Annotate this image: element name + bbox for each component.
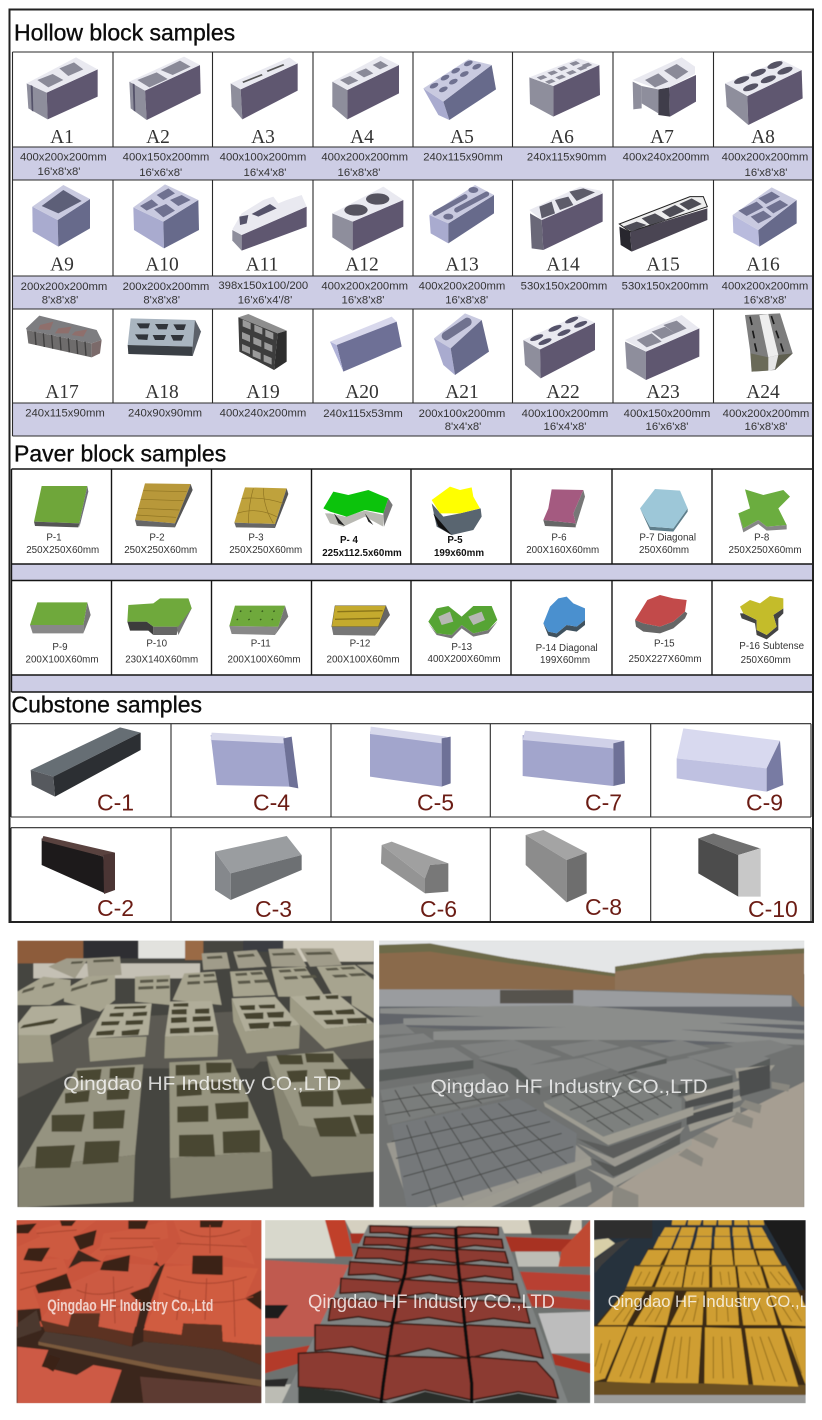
icon: block A21	[434, 313, 489, 375]
paver labels row 1: 250X250X60mm	[124, 545, 197, 556]
dimension labels row 3: 240x90x90mm	[128, 408, 202, 420]
dimension labels row 2: 398x150x100/200	[218, 280, 308, 292]
paver labels row 1: P-6	[551, 533, 567, 544]
watermark: Qingdao HF Industry CO.,LTD	[308, 1292, 555, 1313]
paver labels row 2: P-14 Diagonal	[536, 643, 598, 654]
icon: block A8	[725, 59, 803, 125]
panel: cubstone samples	[11, 692, 811, 922]
paver labels row 2: 200X100X60mm	[26, 655, 98, 666]
dimension labels row 2: 8'x8'x8'	[42, 294, 78, 306]
icons: hollow blocks right, row 3	[434, 313, 793, 380]
table grid: pavers	[12, 469, 812, 692]
icon: paver P-3	[234, 487, 288, 528]
paver labels row 2: 250X60mm	[741, 655, 791, 666]
icon: block A14	[529, 187, 603, 250]
watermark: Qingdao HF Industry CO.,LTD	[63, 1074, 341, 1095]
dimension labels row 1: A5	[450, 127, 474, 148]
heading: paver block samples: Paver block samples	[14, 441, 226, 467]
icon: curb C-10	[698, 833, 761, 897]
curb labels: C-10	[748, 896, 798, 922]
icon: curb C-9	[677, 728, 783, 792]
icon: paver P-9	[30, 602, 91, 633]
icon: block A3	[231, 57, 298, 119]
curb labels: C-9	[746, 790, 783, 816]
dimension labels row 1: 16'x6'x8'	[139, 167, 182, 179]
icon: paver P-5	[432, 487, 482, 535]
icon: block A20	[330, 317, 402, 372]
dimension labels row 1: A1	[50, 127, 74, 148]
dimension labels row 1: 16'x4'x8'	[244, 167, 286, 179]
curb labels: C-4	[253, 790, 290, 816]
dimension labels row 3: 400x150x200mm	[624, 408, 710, 420]
icon: paver P-2	[135, 483, 193, 527]
curb labels: C-7	[585, 790, 622, 816]
dimension labels row 2	[21, 255, 808, 306]
curb labels: C-3	[255, 896, 292, 922]
dimension labels row 2: 530x150x200mm	[521, 280, 607, 292]
photo: red grass pavers	[16, 1220, 262, 1403]
photo: paver bricks in yard	[379, 941, 806, 1207]
paver labels row 1: P-3	[248, 533, 264, 544]
paver labels row 1: 250X60mm	[639, 545, 689, 556]
dimension labels row 1: 400x100x200mm	[220, 152, 306, 164]
curb labels: C-1	[97, 790, 134, 816]
dimension labels row 2: A12	[345, 255, 379, 276]
paver labels row 1: P- 4	[340, 535, 359, 546]
icon: block A23	[625, 315, 699, 380]
dimension labels row 2: A13	[445, 255, 479, 276]
paver labels row 1: 225x112.5x60mm	[322, 548, 402, 559]
icons: cubstones left	[31, 727, 302, 900]
dimension labels row 1: A6	[550, 127, 574, 148]
paver labels row 2: 199X60mm	[540, 655, 590, 666]
dimension labels row 3: A17	[45, 382, 79, 403]
dimension labels row 2: A16	[746, 255, 780, 276]
icon: block A6	[529, 58, 600, 117]
icon: block A1	[27, 57, 98, 119]
dimension labels row 3	[25, 382, 809, 433]
icon: paver P-12	[332, 606, 390, 636]
icons: cubstones right	[370, 727, 783, 902]
dimension labels row 3: 240x115x53mm	[323, 408, 403, 420]
outer frame	[10, 10, 813, 922]
dimension labels row 1: 400x200x200mm	[722, 152, 808, 164]
dimension labels row 2: 400x200x200mm	[722, 280, 808, 292]
dimension labels row 3: A22	[546, 382, 580, 403]
dimension labels row 1: 400x150x200mm	[123, 152, 209, 164]
icon: block A7	[633, 57, 696, 117]
icon: block A9	[32, 185, 90, 247]
dimension labels row 1: 240x115x90mm	[527, 152, 606, 164]
dimension labels row 2: A15	[646, 255, 680, 276]
photo: red interlocking pavers	[265, 1220, 590, 1403]
dimension labels row 1: 16'x8'x8'	[338, 167, 380, 179]
dimension labels row 1: 240x115x90mm	[423, 152, 503, 164]
icon: block A19	[238, 314, 287, 370]
paver labels row 2: 250X227X60mm	[629, 654, 701, 665]
dimension labels row 1: 400x200x200mm	[20, 152, 107, 164]
paver labels row 1: P-1	[46, 533, 62, 544]
icon: paver P-4	[323, 490, 393, 527]
dimension labels row 2: 530x150x200mm	[622, 280, 708, 292]
dimension labels row 2: 16'x6'x4'/8'	[238, 294, 292, 306]
paver labels row 2: P-10	[146, 639, 168, 650]
icon: curb C-3	[215, 836, 302, 900]
icons: pavers P-13 to P-16	[428, 595, 783, 639]
paver labels row 1: P-7 Diagonal	[639, 533, 696, 544]
dimension labels row 1: 16'x8'x8'	[745, 167, 787, 179]
dimension labels row 2: 16'x8'x8'	[342, 294, 384, 306]
dimension labels row 3: A20	[345, 382, 379, 403]
dimension labels row 2: A14	[546, 255, 580, 276]
icons: pavers P-9 to P-12	[30, 598, 390, 636]
dimension labels row 1: 16'x8'x8'	[38, 166, 80, 178]
icon: block A11	[232, 195, 307, 251]
icon: block A12	[332, 187, 403, 251]
dimension labels row 3: 16'x6'x8'	[646, 421, 688, 433]
icon: paver P-7	[640, 489, 688, 532]
curb labels: C-6	[420, 896, 457, 922]
dimension labels row 2: A10	[145, 255, 179, 276]
icons: hollow blocks right, rows 1-2	[423, 57, 803, 252]
icon: block A18	[128, 318, 201, 356]
curb labels	[97, 790, 798, 922]
icon: paver P-15	[635, 595, 687, 633]
dimension labels row 1: A4	[350, 127, 374, 148]
dimension labels row 1: A2	[146, 127, 170, 148]
paver labels row 2: P-9	[52, 642, 68, 653]
icon: curb C-6	[381, 842, 448, 893]
dimension labels row 3: A21	[445, 382, 479, 403]
paver labels row 1: 200X160X60mm	[526, 545, 599, 556]
dimension labels row 2: 16'x8'x8'	[445, 294, 488, 306]
paver labels row 2: 230X140X60mm	[125, 655, 198, 666]
icon: paver P-1	[34, 486, 88, 527]
icon: curb C-7	[523, 731, 625, 786]
icons: pavers P-5 to P-8	[432, 487, 790, 535]
paver labels row 1: 250X250X60mm	[229, 545, 302, 556]
heading: hollow block samples: Hollow block samples	[14, 20, 235, 46]
icon: paver P-16	[740, 596, 783, 639]
icon: block A5	[423, 59, 496, 120]
paver labels row 1: 250X250X60mm	[729, 545, 801, 556]
dimension labels row 2: A11	[246, 255, 278, 276]
icon: block A24	[745, 313, 793, 372]
dimension labels row 2: 200x200x200mm	[123, 281, 209, 293]
paver labels row 2: 400X200X60mm	[428, 654, 500, 665]
dimension labels row 3: 8'x4'x8'	[445, 421, 481, 433]
dimension labels row 2: 400x200x200mm	[321, 280, 408, 292]
watermark: Qingdao HF Industry CO.,LTD	[431, 1077, 708, 1098]
curb labels: C-5	[417, 790, 454, 816]
icons: pavers P-1 to P-4	[34, 483, 393, 528]
paver labels row 2: 200X100X60mm	[228, 655, 300, 666]
dimension labels row 3: 240x115x90mm	[25, 408, 105, 420]
icon: curb C-8	[526, 830, 587, 902]
dimension labels row 2: 8'x8'x8'	[143, 294, 180, 306]
icons: hollow blocks left, row 3	[26, 314, 402, 372]
dimension labels row 2: A9	[50, 255, 74, 276]
icon: curb C-4	[211, 733, 298, 788]
dimension labels row 3: A23	[646, 382, 680, 403]
table grid: hollow blocks	[12, 52, 812, 436]
paver labels row 2: P-11	[251, 639, 271, 650]
icon: block A10	[133, 184, 199, 248]
icon: curb C-2	[42, 836, 115, 894]
dimension labels row 1: 400x240x200mm	[623, 152, 709, 164]
icon: block A4	[332, 56, 399, 119]
icon: block A2	[129, 57, 201, 120]
paver labels row 2: P-16 Subtense	[739, 641, 805, 652]
paver labels row 2: P-15	[654, 639, 675, 650]
icon: block A15	[619, 197, 707, 252]
table grid: cubstones	[11, 724, 811, 922]
paver labels row 2: P-13	[451, 642, 473, 653]
icon: block A16	[733, 187, 797, 247]
curb labels: C-2	[97, 895, 134, 921]
icon: curb C-1	[31, 727, 141, 797]
paver labels row 1: 250X250X60mm	[26, 545, 99, 556]
icon: paver P-10	[127, 598, 192, 635]
dimension labels row 3: A19	[246, 382, 280, 403]
paver labels row 1: P-5	[447, 535, 463, 546]
dimension labels row 1: A3	[251, 127, 275, 148]
heading: cubstone samples: Cubstone samples	[12, 692, 202, 718]
paver labels row 2	[26, 639, 805, 666]
photo: yellow tactile pavers	[594, 1220, 822, 1403]
paver labels row 1: 199x60mm	[434, 548, 484, 559]
dimension labels row 1: 400x200x200mm	[321, 152, 408, 164]
dimension labels row 3: A18	[145, 382, 179, 403]
icon: paver P-14	[543, 597, 585, 638]
panel: paver block samples	[12, 441, 812, 692]
dimension labels row 3: 400x100x200mm	[522, 408, 608, 420]
icon: block A13	[429, 185, 494, 243]
dimension labels row 1: A7	[650, 127, 674, 148]
icon: block A22	[523, 315, 595, 378]
paver labels row 2: P-12	[350, 639, 370, 650]
icon: paver P-13	[428, 606, 497, 638]
dimension labels row 3: 16'x8'x8'	[745, 421, 787, 433]
dimension labels row 3: 16'x4'x8'	[544, 421, 586, 433]
dimension labels row 2: 16'x8'x8'	[744, 294, 786, 306]
icon: block A17	[26, 316, 102, 357]
icon: curb C-5	[370, 727, 451, 787]
dimension labels row 2: 200x200x200mm	[21, 281, 107, 293]
paver labels row 2: 200X100X60mm	[327, 655, 399, 666]
photo: hollow blocks on pallets	[17, 941, 374, 1207]
dimension labels row 1	[20, 127, 808, 179]
dimension labels row 1: A8	[751, 127, 775, 148]
dimension labels row 3: A24	[746, 382, 780, 403]
icon: paver P-8	[738, 489, 790, 532]
dimension labels row 3: 200x100x200mm	[419, 408, 505, 420]
icon: paver P-6	[543, 489, 585, 527]
dimension labels row 2: 400x200x200mm	[419, 280, 505, 292]
watermark: Qingdao HF Industry Co.,Ltd	[47, 1296, 213, 1315]
paver labels row 1	[26, 533, 801, 559]
paver labels row 1: P-8	[754, 533, 770, 544]
icon: paver P-11	[229, 606, 288, 635]
icons: hollow blocks left, rows 1-2	[27, 56, 403, 251]
curb labels: C-8	[585, 894, 622, 920]
dimension labels row 3: 400x200x200mm	[723, 408, 809, 420]
dimension labels row 3: 400x240x200mm	[220, 408, 306, 420]
panel: hollow block samples	[12, 20, 812, 436]
paver labels row 1: P-2	[149, 533, 165, 544]
